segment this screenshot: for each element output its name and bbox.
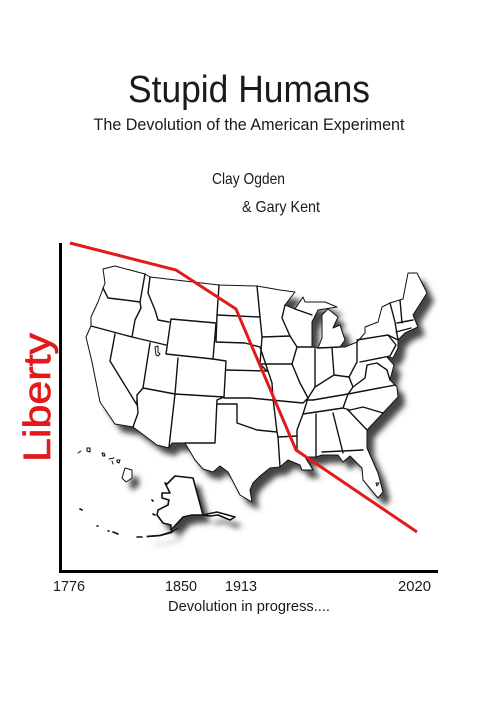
x axis [59, 570, 438, 573]
year 1776: 1776 [53, 578, 85, 595]
author: Clay Ogden: Clay Ogden [212, 171, 285, 188]
map land fill and borders [78, 266, 427, 537]
chart axes [59, 243, 438, 573]
Aleutian islands [80, 500, 155, 537]
Lake Okeechobee [376, 483, 379, 486]
year 1913: 1913 [225, 578, 257, 595]
subtitle: The Devolution of the American Experiment [94, 115, 405, 134]
title: Stupid Humans [128, 69, 370, 111]
Hawaiian islands [87, 448, 120, 463]
map of the United States [78, 266, 434, 545]
year 2020: 2020 [398, 578, 431, 595]
x axis years [53, 578, 431, 595]
y axis [59, 243, 62, 573]
red liberty decline line [70, 243, 417, 532]
author: Gary Kent: & Gary Kent [242, 199, 320, 216]
x axis caption: Devolution in progress.... [168, 598, 330, 615]
year 1850: 1850 [165, 578, 197, 595]
y axis label: Liberty: Liberty [17, 333, 59, 462]
Great Salt Lake [155, 346, 160, 356]
map shadow [93, 274, 434, 545]
